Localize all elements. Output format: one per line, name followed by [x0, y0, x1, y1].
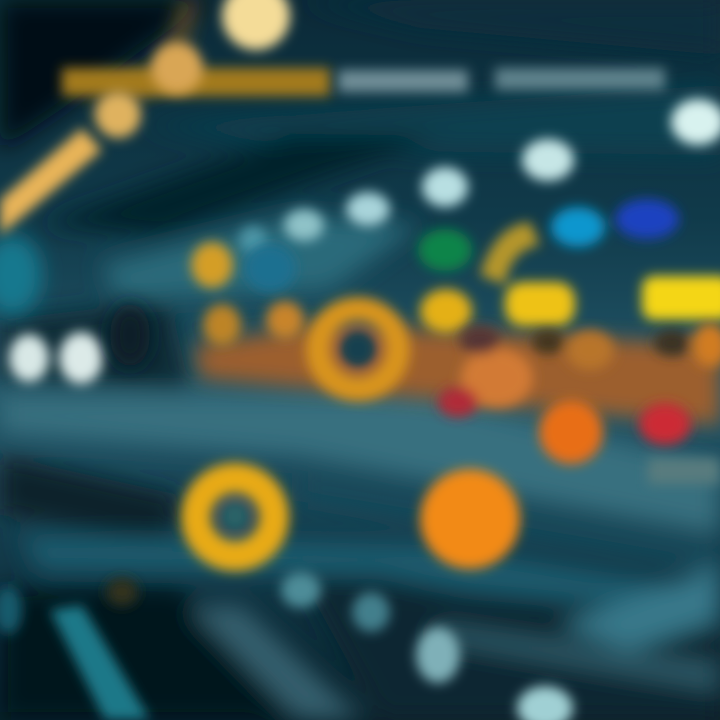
small pale nodes bottom [0, 572, 573, 720]
red node right [639, 403, 691, 445]
pale pair left [9, 332, 103, 384]
orange circle right [539, 400, 603, 464]
gold header bar [62, 68, 330, 96]
large gold ring [196, 478, 274, 556]
orange band [195, 325, 720, 425]
yellow nodes row [191, 222, 720, 346]
dark patch by pale pair [110, 303, 150, 367]
teal streak lower left [50, 605, 150, 720]
grey header text bars [338, 68, 665, 92]
gold connector top [100, 0, 190, 110]
ring: central gold [318, 309, 398, 389]
glowing gold nodes top [95, 0, 290, 138]
teal patch left [0, 235, 42, 315]
pale nodes diagonal [239, 99, 720, 254]
coloured legend nodes [244, 199, 679, 292]
orange and red nodes in band [438, 323, 720, 417]
gold diagonal bar top left [0, 128, 102, 235]
large orange circle [420, 469, 520, 569]
grey label right [648, 458, 720, 484]
